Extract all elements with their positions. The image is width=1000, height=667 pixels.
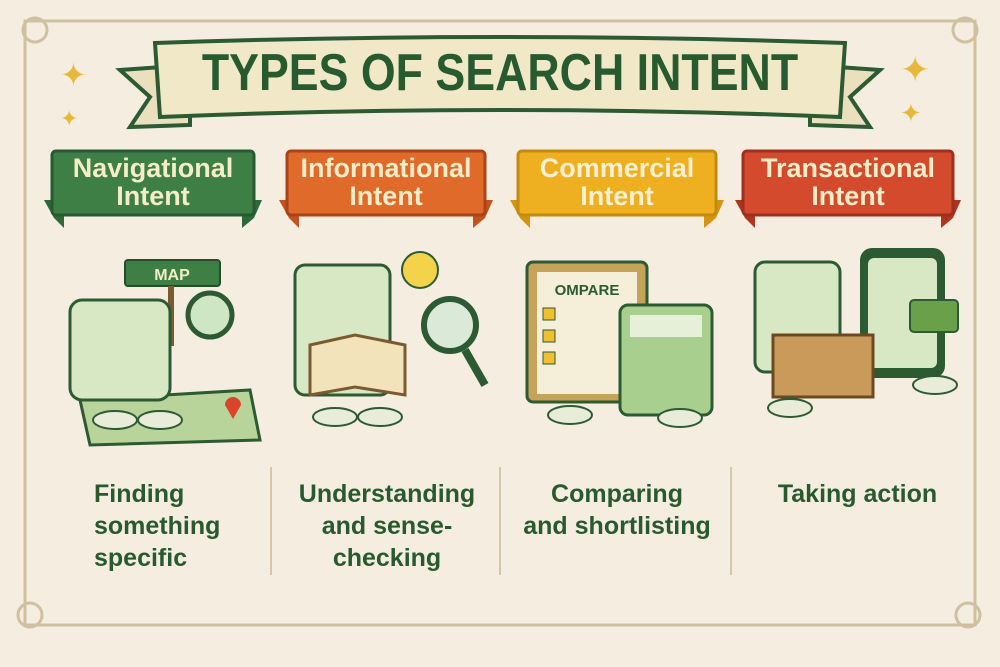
banner: informational	[279, 150, 493, 228]
illustration: commercial (clipboard + calculator): OMPARE	[555, 282, 619, 299]
sparkles: ✦	[60, 57, 87, 93]
banner: transactional: Transactional	[761, 153, 935, 183]
illustration: navigational (map character): MAP	[154, 267, 190, 284]
illustration: navigational (map character)	[68, 259, 262, 446]
banner: informational: Intent	[349, 181, 423, 211]
text: commercial: Comparing	[551, 480, 683, 508]
illustration: commercial (clipboard + calculator)	[526, 260, 714, 428]
banner: commercial: Commercial	[540, 153, 694, 183]
text: navigational: Finding	[94, 480, 184, 508]
text: informational: Understanding	[299, 480, 475, 508]
banner: informational: Informational	[300, 153, 472, 183]
sparkles right: ✦	[900, 98, 922, 128]
illustration: transactional (box + phone)	[754, 248, 959, 418]
banner: navigational: Intent	[116, 181, 190, 211]
sparkles right: ✦	[900, 49, 930, 90]
text: navigational	[94, 480, 220, 572]
title ribbon	[115, 35, 885, 130]
text: navigational: specific	[94, 544, 187, 572]
banner: navigational: Navigational	[73, 153, 233, 183]
text: informational	[299, 480, 475, 572]
text: navigational: something	[94, 512, 220, 540]
text: commercial: and shortlisting	[523, 512, 711, 540]
title text: TYPES OF SEARCH INTENT	[202, 44, 798, 102]
banner: transactional: Intent	[811, 181, 885, 211]
banner: commercial: Intent	[580, 181, 654, 211]
text: transactional: Taking action	[778, 480, 937, 508]
sparkles	[60, 57, 87, 131]
text: informational: checking	[333, 544, 441, 572]
sparkles right	[900, 49, 930, 128]
sparkles: ✦	[60, 106, 78, 131]
text: informational: and sense-	[322, 512, 452, 540]
banner: transactional	[735, 150, 961, 228]
text: commercial	[523, 480, 711, 540]
banner: navigational	[44, 150, 262, 228]
illustration: informational (book character)	[294, 251, 488, 427]
banner: commercial	[510, 150, 724, 228]
